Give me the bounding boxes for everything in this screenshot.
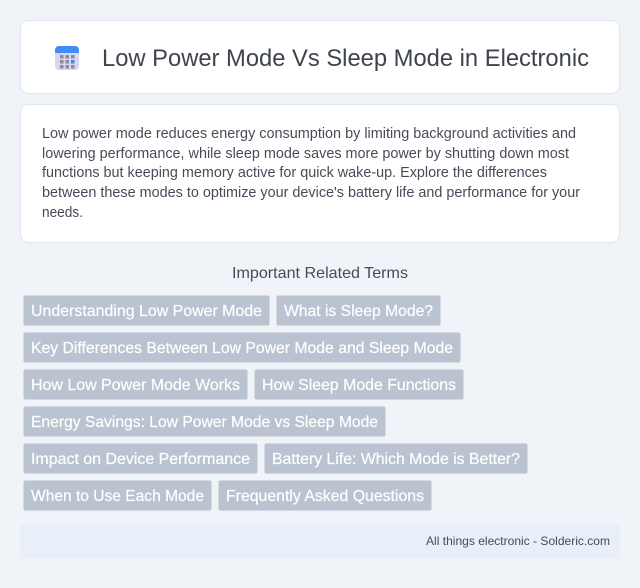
panel: summary: [20, 104, 620, 242]
tag: When to Use Each Mode: [31, 488, 204, 505]
tag: [276, 296, 440, 326]
text block: summary: between these modes to optimize your device's battery life and performance for your: [42, 185, 580, 201]
title: Low Power Mode Vs Sleep Mode in Electronic: [102, 45, 589, 72]
tag: Impact on Device Performance: [31, 451, 250, 468]
footer: All things electronic - Solderic.com: [426, 534, 610, 548]
tag: Frequently Asked Questions: [226, 488, 424, 505]
text block: summary: needs.: [42, 205, 83, 221]
heading: related terms: Important Related Terms: [232, 265, 408, 282]
text block: summary: [42, 126, 580, 221]
tag: Battery Life: Which Mode is Better?: [272, 451, 520, 468]
tag: Understanding Low Power Mode: [31, 303, 262, 320]
tag: How Sleep Mode Functions: [262, 377, 456, 394]
tag: [24, 406, 386, 436]
tag: Key Differences Between Low Power Mode and Sleep Mode: [31, 340, 453, 357]
tag: How Low Power Mode Works: [31, 377, 240, 394]
icon: calendar: [55, 46, 79, 70]
tag list: [24, 296, 528, 510]
tag: What is Sleep Mode?: [284, 303, 433, 320]
tag: [264, 444, 528, 474]
panel: header: [20, 20, 620, 94]
tag: [254, 370, 464, 400]
tag: [24, 370, 248, 400]
footer: [20, 524, 620, 558]
tag: [24, 444, 258, 474]
tag: [24, 296, 270, 326]
text block: summary: Low power mode reduces energy consumption by limiting background activities and: [42, 126, 576, 142]
tag: [24, 332, 460, 362]
tag: [218, 480, 432, 510]
tag: Energy Savings: Low Power Mode vs Sleep Mode: [31, 414, 378, 431]
text block: summary: lowering performance, while sleep mode saves more power by shutting down most: [42, 146, 569, 162]
text block: summary: functions but keeping memory active for quick wake-up. Explore the differences: [42, 165, 547, 181]
tag: [24, 480, 212, 510]
